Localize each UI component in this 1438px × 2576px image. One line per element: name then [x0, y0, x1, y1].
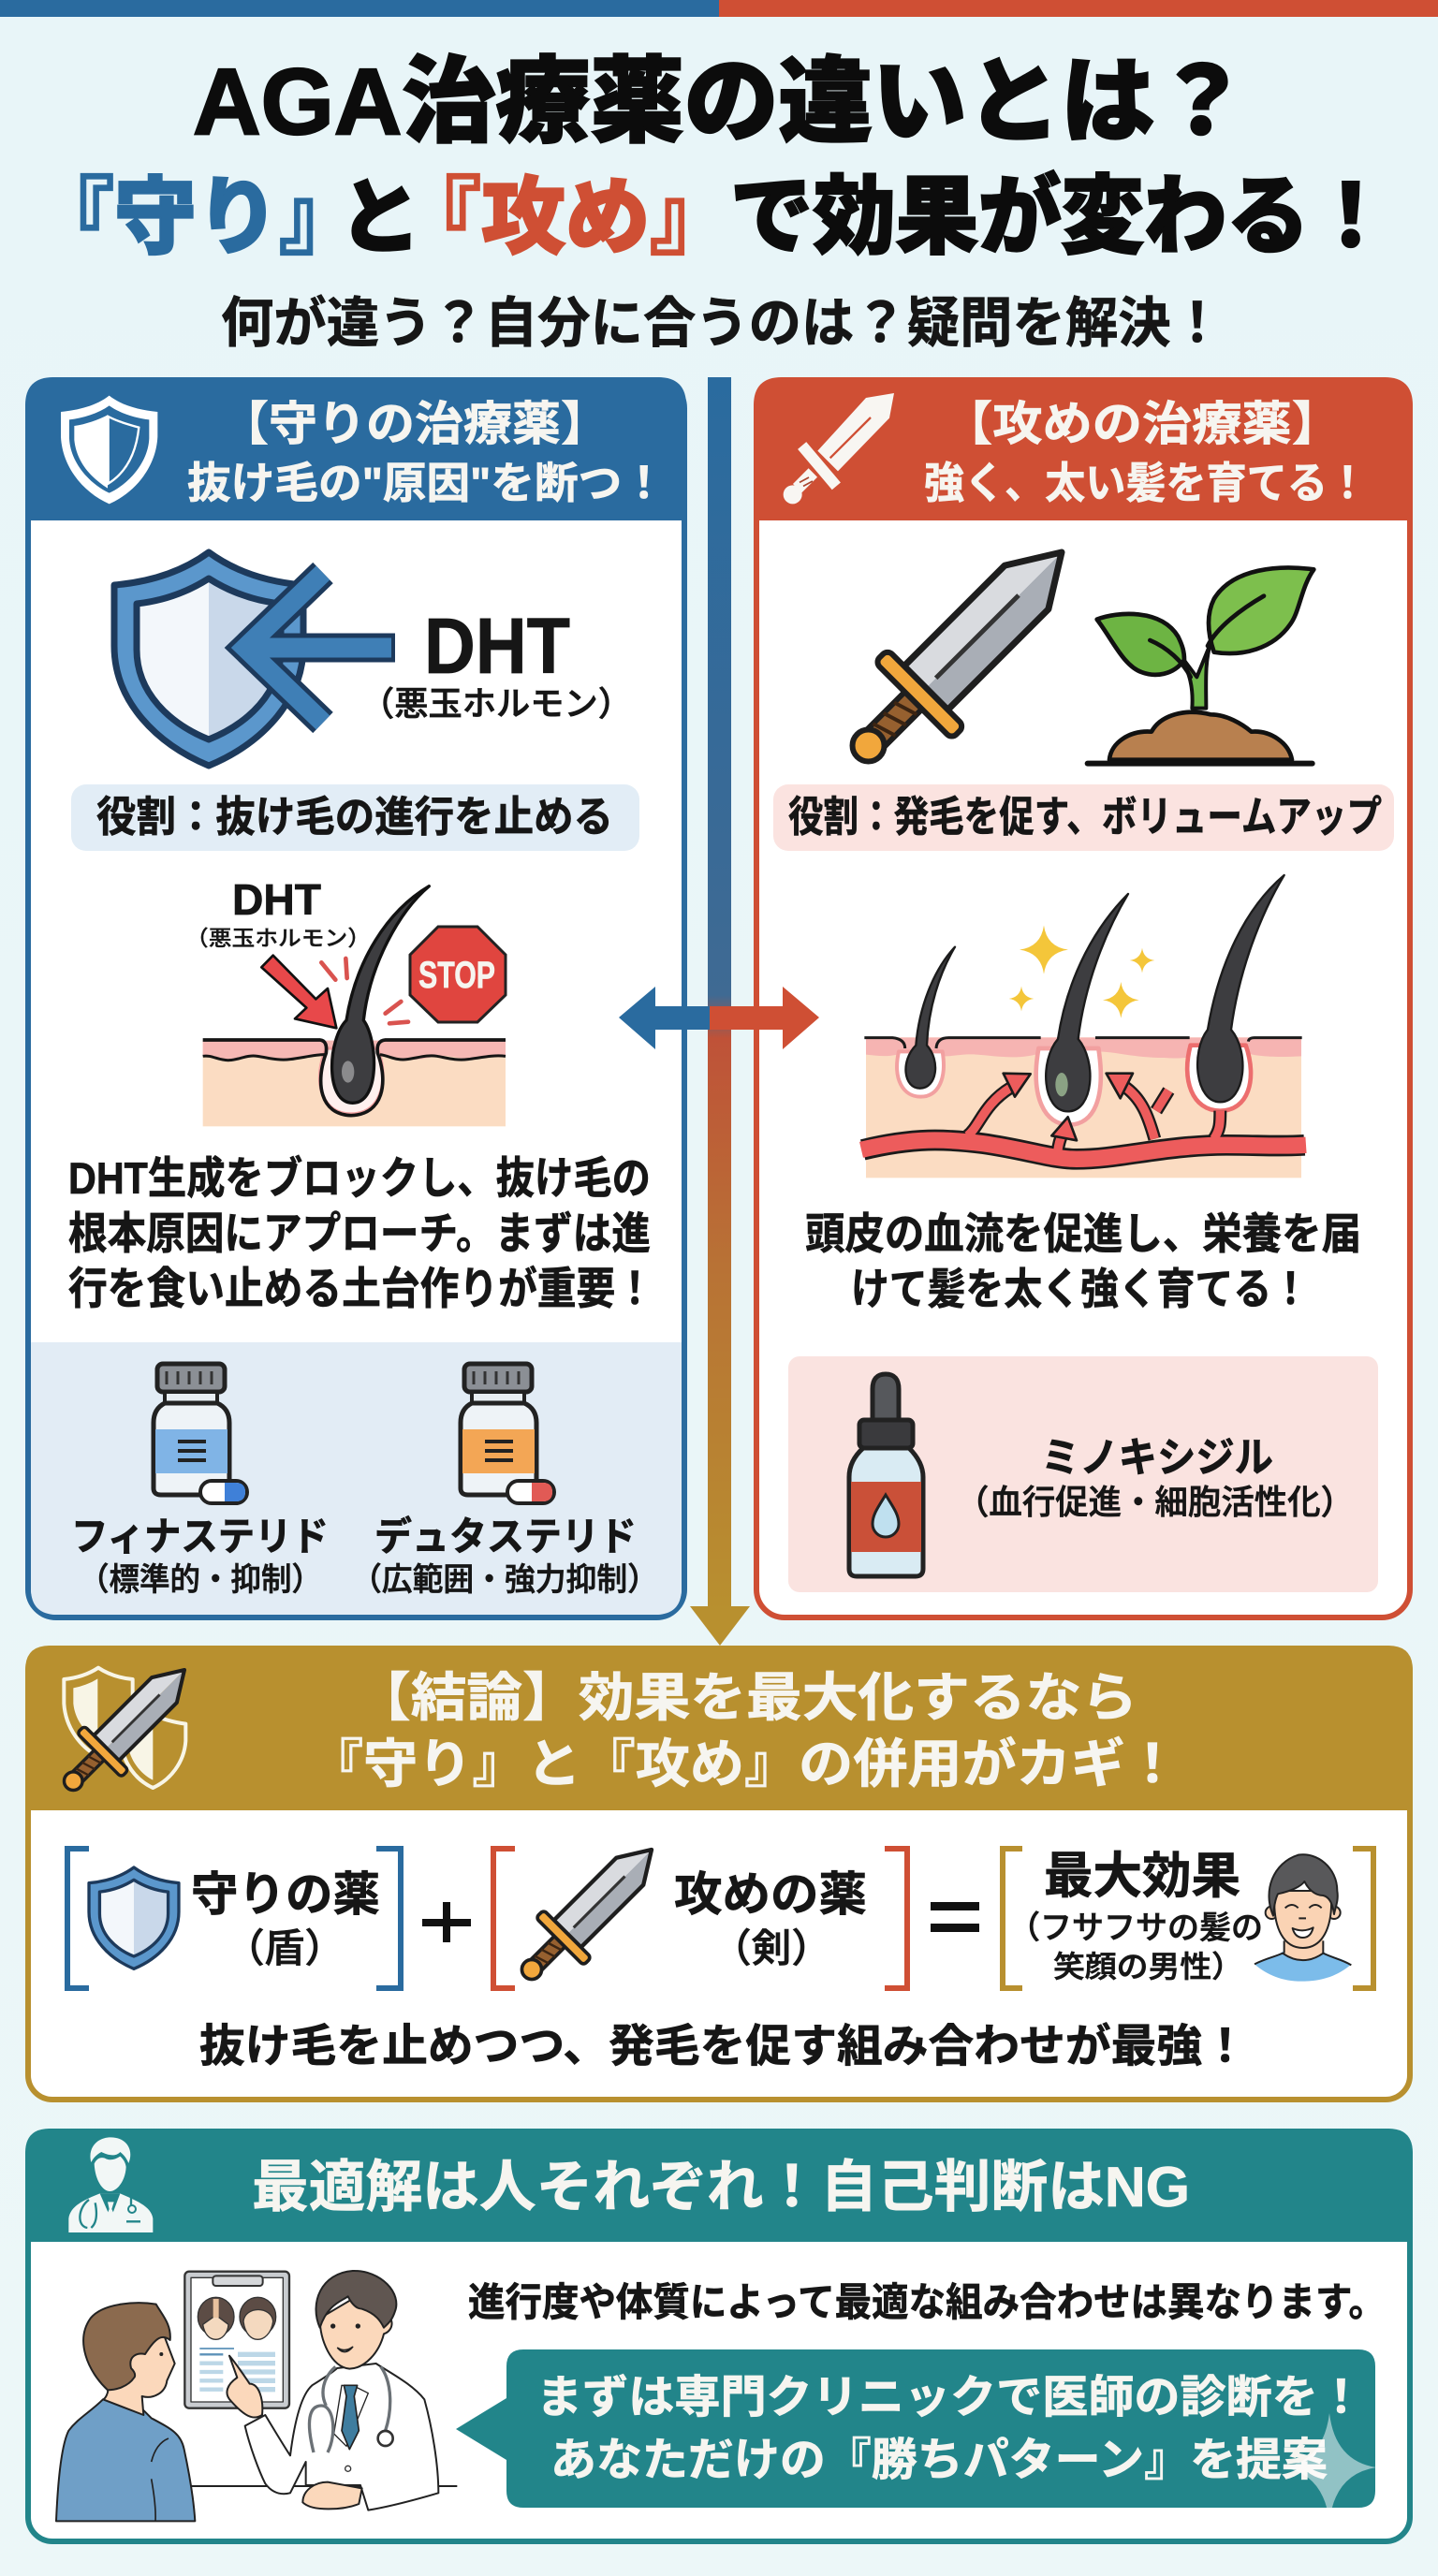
DHT label: DHT	[424, 602, 570, 690]
defense label: （盾）	[225, 1926, 345, 1970]
conclusion text: 抜け毛を止めつつ、発毛を促す組み合わせが最強！	[199, 2022, 1248, 2071]
explanation text: 根本原因にアプローチ。まずは進	[68, 1208, 651, 1258]
top accent bar	[0, 0, 1438, 17]
DHT small label: （悪玉ホルモン）	[185, 926, 371, 950]
explanation text: 頭皮の血流を促進し、栄養を届	[805, 1209, 1361, 1258]
double arrow: red	[710, 987, 819, 1049]
icon: sword	[818, 514, 1100, 796]
role pill: 役割：抜け毛の進行を止める	[96, 793, 613, 841]
DHT label: （悪玉ホルモン）	[360, 684, 632, 723]
offense label: 攻めの薬	[674, 1868, 867, 1921]
icon: sword	[501, 1826, 675, 2000]
title: 『攻め』	[397, 171, 734, 265]
header text	[309, 1668, 1180, 1793]
bracket: maximum effect	[1003, 1849, 1373, 1988]
defense label	[191, 1868, 380, 1970]
panel: conclusion	[25, 1646, 1413, 2100]
plus sign	[422, 1902, 471, 1942]
offense label: （剣）	[712, 1926, 831, 1970]
panel header	[25, 1646, 1413, 1810]
icon: finasteride bottle	[154, 1364, 247, 1503]
finasteride label	[71, 1515, 329, 1598]
explanation text: DHT生成をブロックし、抜け毛の	[68, 1153, 651, 1203]
icon: doctor	[68, 2137, 153, 2232]
hair growth illustration	[861, 875, 1306, 1178]
panel: defensive treatment	[25, 377, 686, 1617]
finasteride label: フィナステリド	[71, 1515, 329, 1559]
maximum effect label: （フサフサの髪の	[1008, 1910, 1263, 1946]
icon: sprout	[1088, 567, 1313, 764]
icon: dropper bottle	[849, 1374, 923, 1576]
header text: 強く、太い髪を育てる！	[924, 459, 1368, 507]
explanation text: けて髪を太く強く育てる！	[851, 1265, 1310, 1313]
sparkle watermark	[1283, 2413, 1376, 2522]
maximum effect label: 最大効果	[1044, 1849, 1240, 1904]
maximum effect label	[1008, 1849, 1263, 1983]
role pill	[773, 784, 1394, 851]
panel body	[28, 380, 684, 1617]
icon: white sword	[784, 393, 894, 504]
minoxidil label: ミノキシジル	[1041, 1435, 1273, 1481]
panel body	[28, 2131, 1410, 2541]
header text: 最適解は人それぞれ！自己判断はNG	[252, 2156, 1190, 2218]
panel header	[754, 377, 1413, 520]
minoxidil label	[956, 1435, 1354, 1521]
medicine box	[788, 1356, 1378, 1592]
icon: stop sign	[410, 927, 506, 1022]
minoxidil label: （血行促進・細胞活性化）	[956, 1483, 1354, 1521]
explanation text	[68, 1153, 654, 1313]
panel body	[28, 1648, 1410, 2100]
icon: white shield	[61, 396, 157, 504]
subtitle: 何が違う？自分に合うのは？疑問を解決！	[221, 293, 1224, 354]
central axis arrow	[690, 377, 750, 1646]
header text: 抜け毛の"原因"を断つ！	[187, 459, 666, 507]
header text	[924, 398, 1368, 507]
hair follicle DHT block illustration	[203, 886, 506, 1126]
DHT label	[360, 602, 632, 723]
DHT small label: DHT	[232, 875, 321, 924]
advice text: 進行度や体質によって最適な組み合わせは異なります。	[468, 2280, 1386, 2324]
equals sign	[931, 1902, 979, 1932]
panel: offensive treatment	[754, 377, 1413, 1617]
icon: shields and sword	[45, 1647, 207, 1809]
icon: shield	[89, 1867, 179, 1969]
icon: smiling man	[1255, 1854, 1351, 1982]
explanation text: 行を食い止める土台作りが重要！	[68, 1264, 654, 1313]
doctor consultation illustration	[56, 2271, 457, 2521]
icon: dutasteride bottle	[461, 1364, 554, 1503]
header text: 【守りの治療薬】	[220, 398, 609, 450]
callout: あなただけの『勝ちパターン』を提案	[550, 2436, 1328, 2485]
role pill	[71, 784, 639, 851]
bracket: offense	[493, 1826, 907, 2000]
header text: 【攻めの治療薬】	[943, 398, 1342, 450]
panel body	[756, 380, 1410, 1617]
callout: まずは専門クリニックで医師の診断を！	[536, 2373, 1364, 2422]
finasteride label: （標準的・抑制）	[79, 1562, 322, 1598]
medicine area	[31, 1342, 682, 1615]
title	[32, 50, 1392, 265]
maximum effect label: 笑顔の男性）	[1053, 1950, 1243, 1983]
offense label	[674, 1868, 867, 1970]
icon: stop sign: STOP	[418, 955, 495, 996]
defense label: 守りの薬	[191, 1868, 380, 1921]
icon: shield blocking arrow	[114, 552, 395, 766]
panel header	[25, 377, 686, 520]
callout	[456, 2349, 1375, 2508]
DHT small label	[185, 875, 371, 950]
double arrow: blue	[619, 987, 719, 1049]
panel: consult a doctor	[25, 2129, 1413, 2541]
header text	[187, 398, 666, 507]
explanation text	[805, 1209, 1361, 1313]
header text: 【結論】効果を最大化するなら	[355, 1668, 1137, 1727]
panel header	[25, 2129, 1413, 2242]
title: で効果が変わる！	[730, 169, 1392, 265]
header text: 『守り』と『攻め』の併用がカギ！	[309, 1734, 1180, 1793]
title: AGA治療薬の違いとは？	[193, 50, 1249, 154]
title: 『守り』	[32, 171, 361, 265]
bracket: defense	[67, 1849, 401, 1988]
dutasteride label: （広範囲・強力抑制）	[351, 1562, 658, 1598]
title: と	[339, 171, 421, 264]
dutasteride label	[351, 1515, 658, 1598]
dutasteride label: デュタステリド	[374, 1515, 637, 1559]
